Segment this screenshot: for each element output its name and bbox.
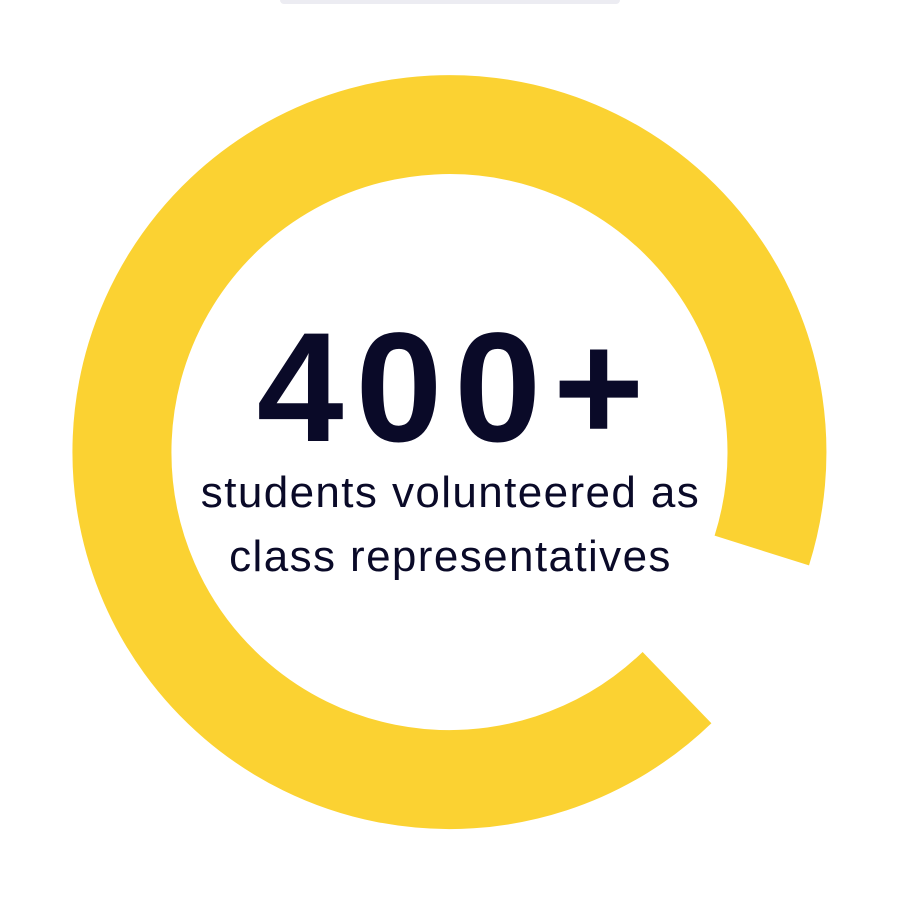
caption text: [201, 468, 700, 581]
caption text: students volunteered as: [201, 468, 700, 517]
big number: 400+: [257, 301, 656, 475]
top shadow strip: [280, 0, 620, 4]
caption text: class representatives: [229, 532, 672, 581]
